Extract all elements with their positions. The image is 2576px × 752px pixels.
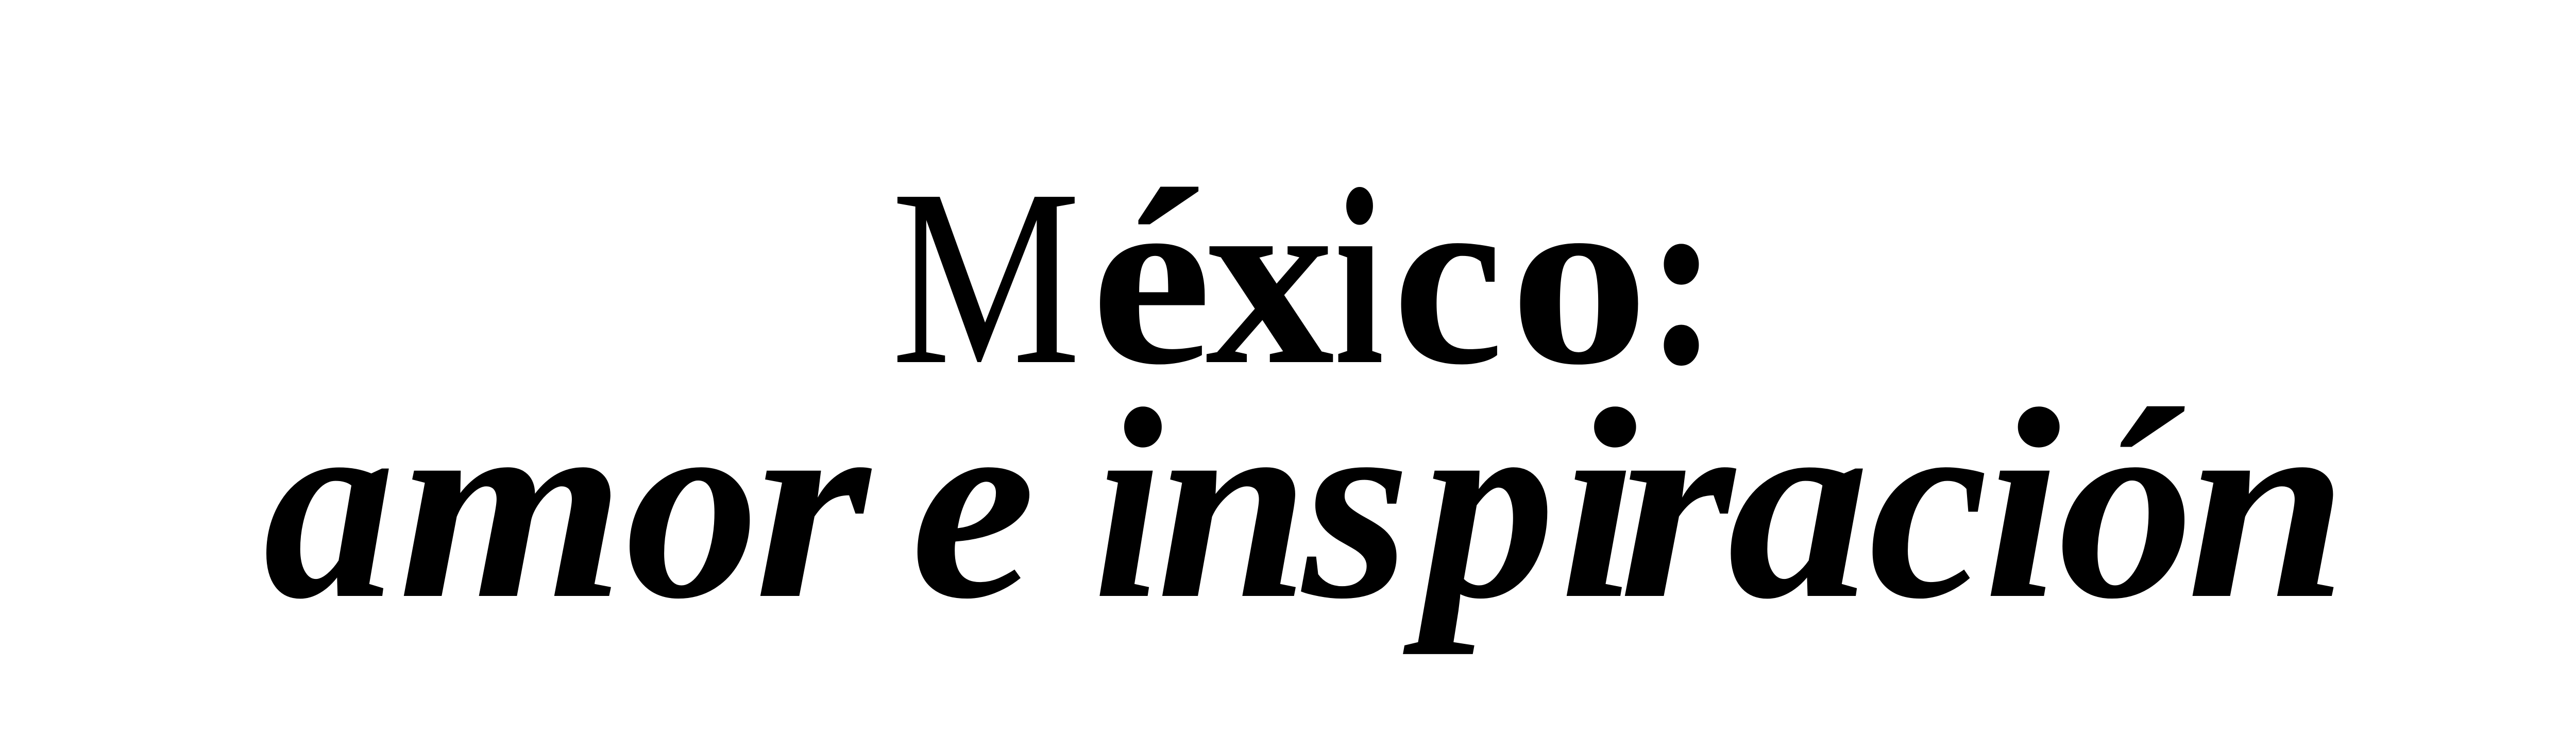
title line 2: c	[1869, 353, 1988, 655]
title line 1: M	[891, 137, 1081, 417]
title line 2: s	[1298, 353, 1411, 655]
title line 1: x	[1206, 137, 1334, 417]
title line 2: i	[1093, 353, 1164, 655]
title line 2: n	[2187, 353, 2348, 655]
title line 2: i	[1560, 353, 1638, 655]
title line 2: a	[1727, 353, 1870, 655]
title line 1: é	[1091, 137, 1212, 417]
title line 2: r	[1619, 353, 1739, 655]
title line 2: n	[1157, 353, 1309, 655]
title line 1: o	[1510, 137, 1649, 417]
title line 2: p	[1401, 353, 1555, 656]
title line 2: r	[754, 353, 875, 655]
title line 1: c	[1393, 137, 1503, 417]
title line 1: i	[1334, 137, 1384, 417]
title line 2: a	[263, 353, 395, 655]
title line 2: i	[1984, 353, 2062, 655]
title line 2: m	[398, 353, 625, 655]
title line 2: e	[911, 353, 1036, 655]
title line 2: ó	[2058, 353, 2194, 655]
title line 1: :	[1646, 137, 1718, 417]
title line 2: o	[625, 353, 759, 655]
